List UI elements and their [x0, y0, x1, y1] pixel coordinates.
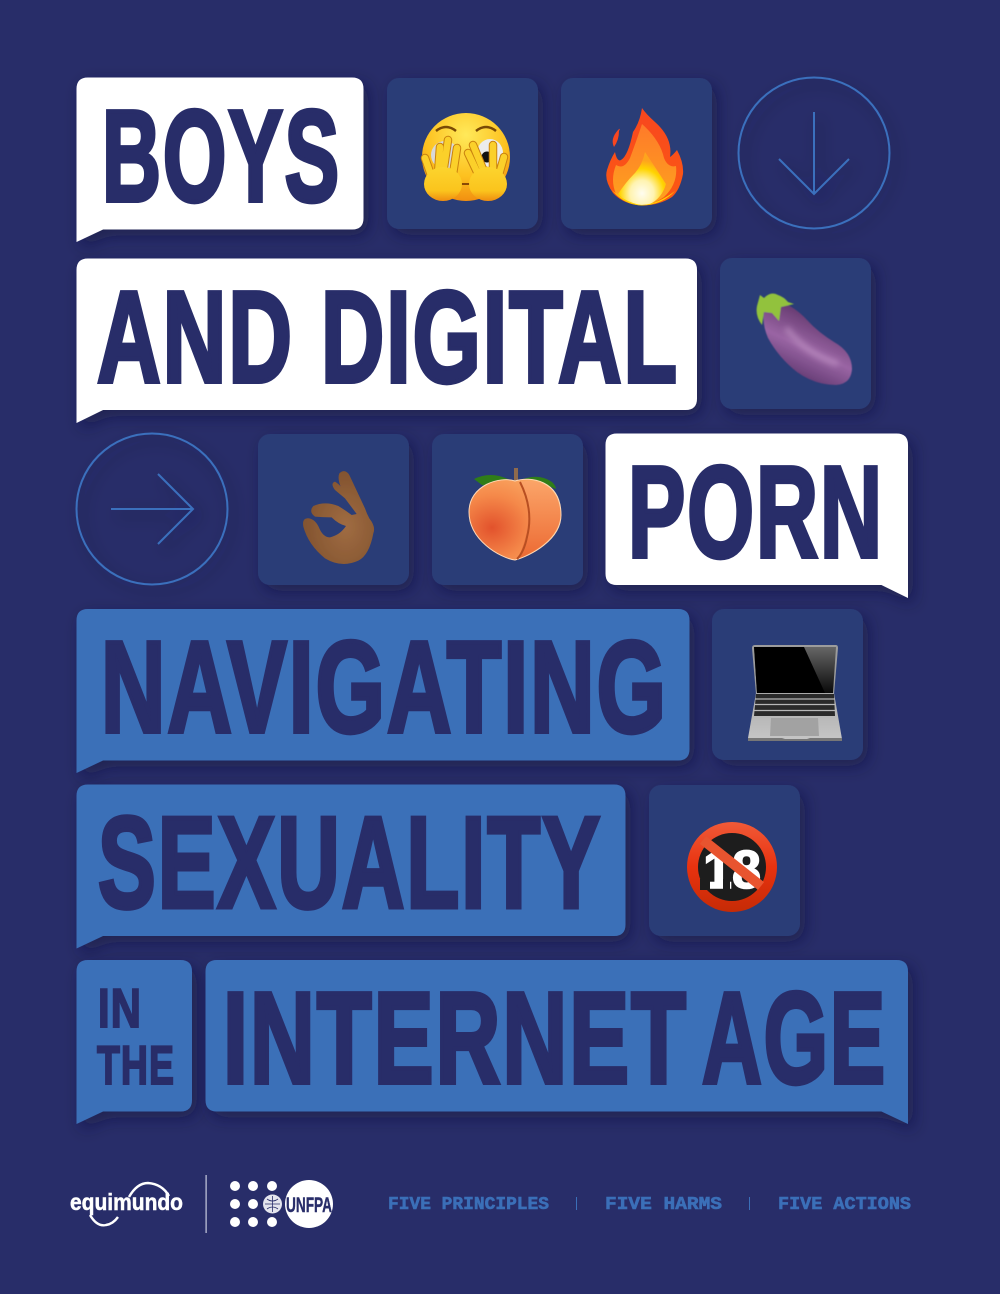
footer label: five harms: FIVE HARMS — [605, 1195, 722, 1215]
subtitle bubble: INTERNET AGE: AGE — [702, 965, 887, 1111]
icon: OK hand — [303, 471, 374, 564]
subtitle bubble: SEXUALITY: SEXUALITY — [98, 789, 602, 935]
icon: peach — [469, 468, 561, 560]
subtitle bubble: NAVIGATING — [76, 609, 690, 773]
icon: down arrow in circle — [738, 78, 890, 228]
title bubble: PORN — [606, 434, 908, 598]
logo: equimundo — [70, 1183, 183, 1225]
tile: no under 18 emoji — [649, 785, 800, 936]
subtitle bubble: NAVIGATING: NAVIGATING — [101, 614, 668, 760]
title bubble: AND DIGITAL: DIGITAL — [321, 264, 679, 410]
dots — [230, 1181, 277, 1227]
subtitle bubble: IN THE: THE — [97, 1034, 175, 1096]
subtitle bubble: IN THE: IN — [98, 977, 142, 1039]
icon: fire — [606, 108, 683, 206]
UN emblem — [263, 1194, 282, 1214]
logo: equimundo: equimundo — [70, 1189, 183, 1215]
subtitle bubble: INTERNET AGE: INTERNET — [223, 965, 688, 1111]
logo: UNFPA — [230, 1180, 333, 1228]
footer label: five actions: FIVE ACTIONS — [778, 1195, 911, 1215]
title bubble: AND DIGITAL: AND — [97, 264, 294, 410]
logo: UNFPA: UNFPA — [286, 1194, 332, 1217]
tile: eggplant emoji — [720, 258, 871, 409]
tile: laptop emoji — [712, 609, 863, 760]
tile: peach emoji — [432, 434, 583, 585]
logo divider — [206, 1175, 207, 1233]
icon: right arrow in circle — [76, 434, 228, 584]
icon: face with peeking eye — [422, 113, 510, 201]
icon: no one under eighteen: 18 — [703, 840, 761, 900]
subtitle bubble: IN THE — [76, 960, 192, 1124]
subtitle bubble: SEXUALITY — [76, 784, 626, 948]
tile: fire emoji — [561, 78, 712, 229]
tile: face with hands over eyes emoji — [387, 78, 538, 229]
footer label: five principles: FIVE PRINCIPLES — [388, 1195, 549, 1215]
icon: laptop — [748, 645, 842, 741]
title bubble: AND DIGITAL — [76, 258, 697, 423]
title bubble: BOYS — [76, 78, 364, 242]
tile: OK hand emoji — [258, 434, 409, 585]
title bubble: BOYS: BOYS — [102, 83, 341, 229]
icon: eggplant — [757, 294, 852, 385]
icon: no one under eighteen — [687, 822, 777, 912]
